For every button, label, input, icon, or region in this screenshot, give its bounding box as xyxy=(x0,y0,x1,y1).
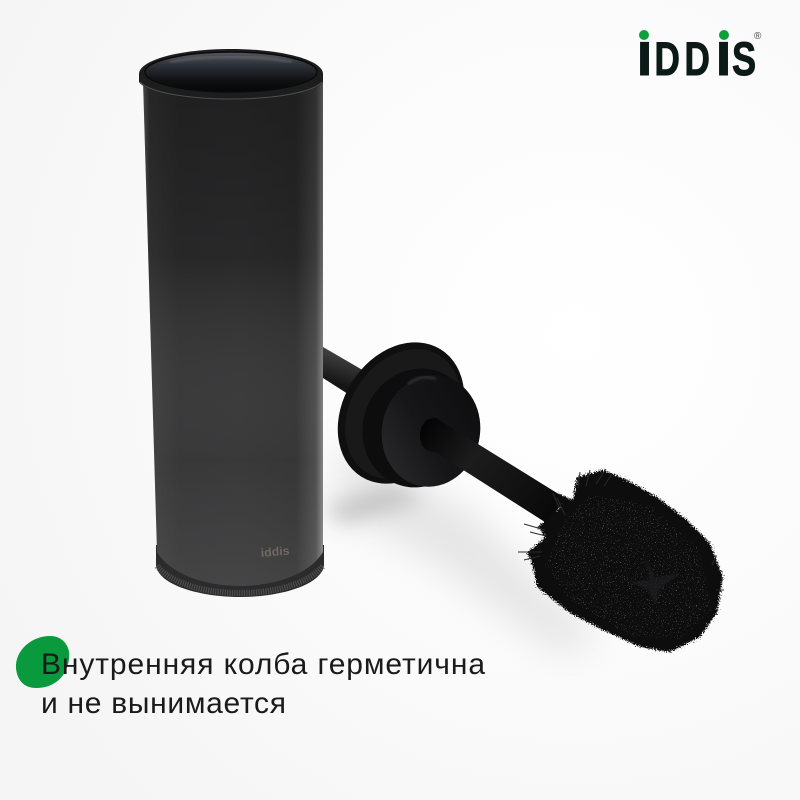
plug cylinder xyxy=(346,353,490,503)
canister base ring xyxy=(156,545,324,597)
caption xyxy=(41,648,485,720)
logo: IDDIS: I xyxy=(716,32,731,85)
logo: IDDIS: D xyxy=(684,32,710,85)
bristle highlights xyxy=(545,495,712,640)
caption: и не вынимается xyxy=(41,687,286,720)
registered mark: ® xyxy=(754,31,762,42)
canister rim xyxy=(139,49,323,100)
logo: IDDIS: I xyxy=(637,32,652,85)
bristle mass xyxy=(527,470,723,652)
logo dot right xyxy=(719,30,729,40)
brush handle upper section xyxy=(323,347,366,394)
green blob xyxy=(16,636,69,688)
caption: Внутренняя колба герметична xyxy=(41,648,485,681)
logo dot left xyxy=(639,30,649,40)
brush handle lower section xyxy=(420,418,565,524)
plug flange xyxy=(312,319,490,507)
canister xyxy=(139,49,324,597)
logo: IDDIS: S xyxy=(732,32,756,85)
canister rim highlight xyxy=(140,82,322,99)
canister engraved logo: iddis xyxy=(260,543,290,560)
brush head xyxy=(518,469,724,652)
canister opening xyxy=(145,52,317,92)
stray bristles xyxy=(518,469,724,590)
canister body xyxy=(143,80,323,586)
brush centre star xyxy=(630,555,682,605)
cast shadows xyxy=(325,440,600,655)
plug end face xyxy=(371,366,491,496)
logo: IDDIS: D xyxy=(654,32,680,85)
logo: IDDIS xyxy=(637,30,762,85)
brush plug xyxy=(312,319,491,507)
plug highlight xyxy=(408,377,436,384)
